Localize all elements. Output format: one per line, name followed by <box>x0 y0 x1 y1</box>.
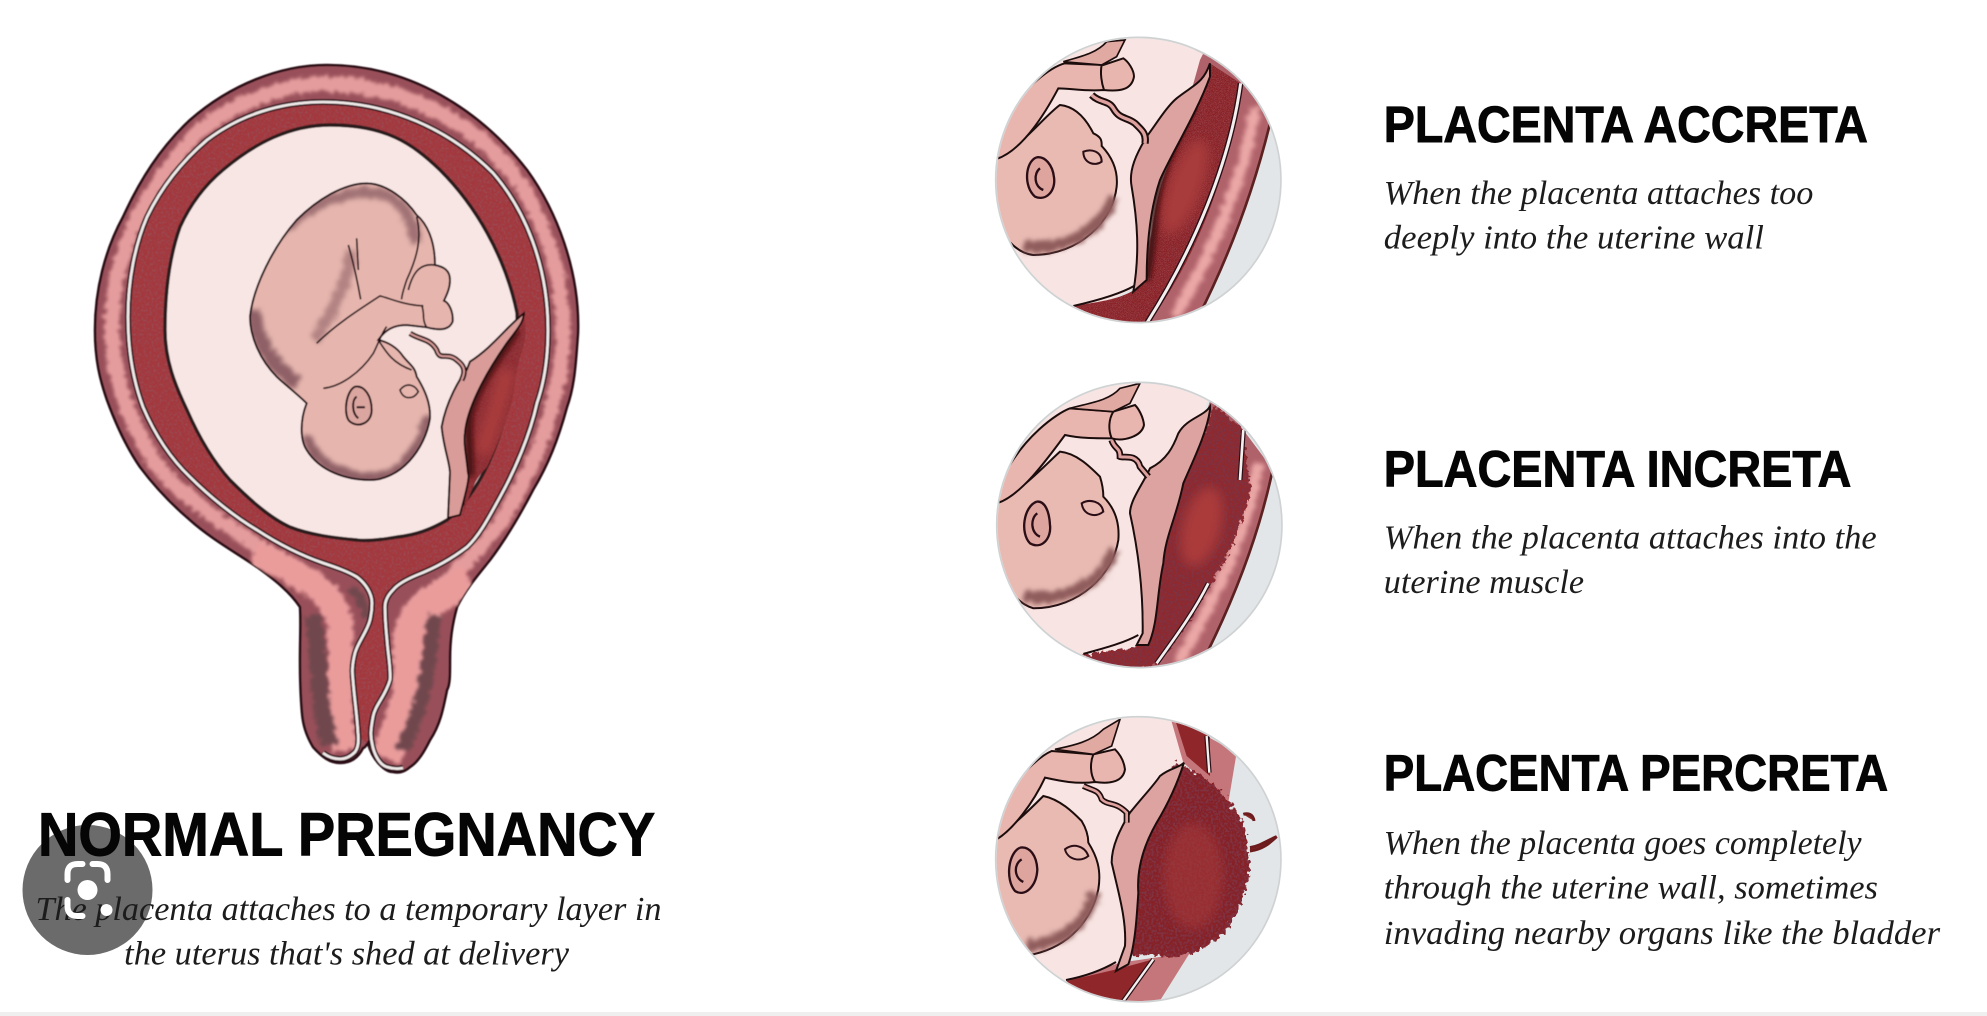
invading red placenta <box>1083 403 1250 677</box>
heading: placenta increta: PLACENTA INCRETA <box>1384 441 1851 498</box>
umbilical cord <box>410 333 464 380</box>
umbilical cord <box>1112 440 1148 477</box>
uterine wall <box>1125 50 1270 322</box>
fetal head <box>990 105 1117 255</box>
illustration: placenta percreta circle <box>994 716 1282 1003</box>
fetal shading <box>253 193 428 478</box>
heading: normal pregnancy: NORMAL PREGNANCY <box>38 800 655 868</box>
fetal arm and fist <box>993 58 1134 160</box>
wall shading <box>112 84 563 758</box>
panel: placenta percreta text <box>1384 745 1941 952</box>
description: placenta increta: uterine muscle <box>1384 564 1584 601</box>
illustration: normal pregnancy uterus <box>95 65 578 772</box>
fetal head <box>990 452 1119 608</box>
placenta centre <box>1163 823 1223 929</box>
ear and eye <box>1009 847 1037 893</box>
lower wall section <box>1067 953 1190 1006</box>
description: placenta increta: When the placenta attaches into the <box>1384 520 1877 557</box>
panel: placenta increta text <box>1384 441 1877 601</box>
eye <box>400 385 418 398</box>
white membrane <box>1147 83 1241 323</box>
description: placenta accreta <box>1384 175 1813 256</box>
cavity <box>1014 38 1203 306</box>
fetal outline <box>250 183 453 480</box>
fetal arm and fist <box>997 405 1144 503</box>
uterine muscle wall <box>95 65 578 772</box>
chorionic plate <box>1112 763 1184 971</box>
fetus <box>250 183 453 480</box>
ear <box>346 386 372 425</box>
placenta dark edge <box>1147 107 1193 280</box>
description: placenta accreta: deeply into the uterine wall <box>1384 219 1764 256</box>
panel: placenta accreta text <box>1384 96 1868 256</box>
white membrane fragments <box>1157 430 1243 663</box>
description: normal pregnancy <box>35 891 661 972</box>
ear and eye <box>1024 502 1050 545</box>
heading: placenta accreta: PLACENTA ACCRETA <box>1384 96 1868 153</box>
uterine wall <box>1130 402 1272 667</box>
placenta centre <box>482 370 508 453</box>
membrane line <box>128 102 548 769</box>
illustration: placenta increta circle <box>996 382 1283 668</box>
chorionic plate <box>1130 407 1210 645</box>
placenta <box>462 315 525 520</box>
cavity <box>1021 384 1208 657</box>
red uterine lining and cervical canal <box>128 102 548 743</box>
invading fringes <box>1243 814 1277 851</box>
description: normal pregnancy: The placenta attaches to a temporary layer in <box>35 891 661 928</box>
red lining <box>1073 63 1241 330</box>
description: placenta accreta: When the placenta attaches too <box>1384 175 1813 212</box>
umbilical cord <box>1083 786 1127 823</box>
umbilical cord <box>1092 95 1145 143</box>
lens button background <box>22 825 152 955</box>
description: placenta percreta: invading nearby organs like the bladder <box>1384 915 1941 952</box>
description: placenta percreta: through the uterine wall, sometimes <box>1384 869 1878 906</box>
erupting placenta <box>1125 763 1249 956</box>
placenta centre <box>1177 484 1226 568</box>
fetus and placenta detail <box>250 183 525 520</box>
icon: lens button glyph <box>68 864 112 916</box>
description: placenta increta <box>1384 520 1877 601</box>
fetal creases <box>317 217 435 388</box>
fetal head <box>987 796 1099 954</box>
upper wall section <box>1172 722 1236 801</box>
description: normal pregnancy: the uterus that's shed at delivery <box>124 935 570 972</box>
chorionic plate <box>442 313 524 518</box>
heading: placenta percreta: PLACENTA PERCRETA <box>1384 745 1888 802</box>
illustration: placenta accreta circle <box>994 36 1282 324</box>
fetal arm and fist <box>997 749 1125 839</box>
placenta centre <box>1154 138 1211 236</box>
placenta dark edge <box>469 330 517 477</box>
description: placenta percreta <box>1384 825 1941 952</box>
panel: normal pregnancy text <box>35 800 661 972</box>
amniotic cavity <box>165 125 517 540</box>
chorionic plate <box>1131 63 1210 292</box>
description: placenta percreta: When the placenta goes completely <box>1384 825 1862 862</box>
cavity <box>1026 718 1186 982</box>
ear and eye <box>1027 157 1054 198</box>
